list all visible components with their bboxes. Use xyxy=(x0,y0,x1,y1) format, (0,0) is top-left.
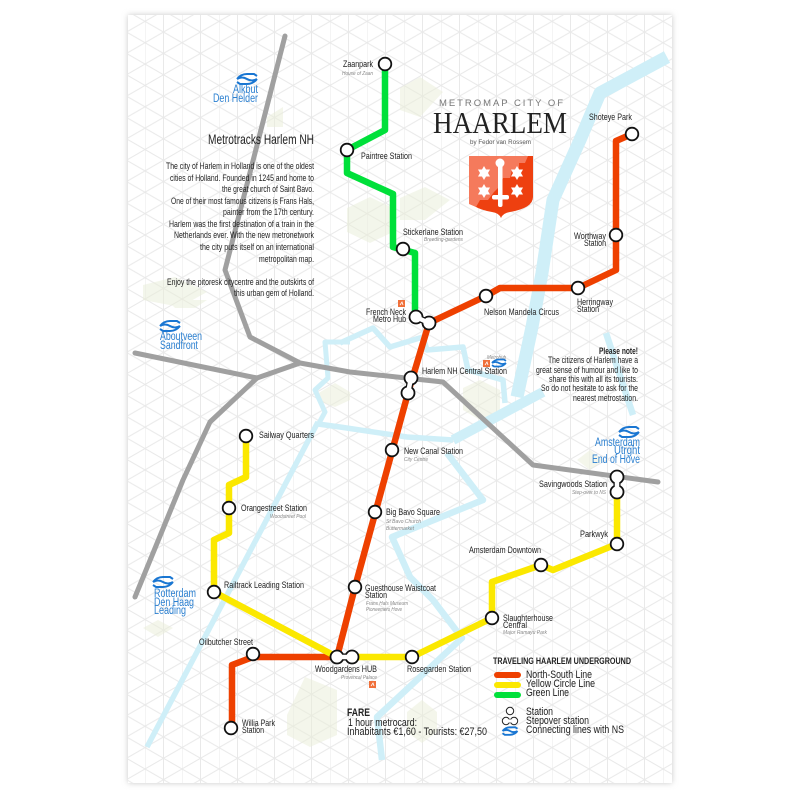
NS connection: Amsterdam xyxy=(592,427,641,466)
station labels: Herringway xyxy=(577,297,613,308)
station labels: Guesthouse Waistcoat xyxy=(365,583,436,594)
intro text panel: metropolitan map. xyxy=(259,254,314,265)
north-south line xyxy=(232,134,632,728)
intro text panel: this urban gem of Holland. xyxy=(234,288,314,299)
station labels: Sailway Quarters xyxy=(259,430,314,441)
NS connection: Aboutveen xyxy=(160,321,202,352)
station labels: Metrohub xyxy=(487,355,506,361)
title block: METROMAP CITY OF xyxy=(439,98,563,109)
legend: Station xyxy=(526,706,553,718)
icon: NS Central Station xyxy=(492,360,506,366)
NS connection: Alkbut xyxy=(213,74,259,105)
title block: HAARLEM xyxy=(433,105,567,140)
stepover station: Woodgardens xyxy=(330,650,358,664)
station labels: Major Ramayu Park xyxy=(503,630,547,636)
station labels: Oilbutcher Street xyxy=(199,637,253,648)
intro text panel: Harlem was the first destination of a train in the xyxy=(169,219,314,230)
station labels: Central xyxy=(503,620,527,631)
station labels: Station xyxy=(242,725,264,736)
green line xyxy=(347,64,415,318)
fare info: Inhabitants €1,60 - Tourists: €27,50 xyxy=(347,726,487,738)
callout: please note: nearest metrostation. xyxy=(573,393,638,404)
rivers and canals xyxy=(147,57,667,760)
station labels: Station xyxy=(577,304,599,315)
legend: Connecting lines with NS xyxy=(526,724,624,736)
intro text panel: Netherlands ever. With the new metronetwork xyxy=(174,230,314,241)
station labels: Railtrack Leading Station xyxy=(224,580,304,591)
callout: please note: So do not hesitate to ask for the xyxy=(541,383,638,394)
station labels: Parkwyk xyxy=(580,529,608,540)
legend: Yellow Circle Line xyxy=(526,678,595,690)
NS connection: Rotterdam: Leading xyxy=(154,605,186,617)
legend: Green Line xyxy=(526,687,569,699)
station labels: House of Zaan xyxy=(342,71,373,77)
legend: North-South Line xyxy=(526,669,592,681)
station labels: Slaughterhouse xyxy=(503,613,553,624)
station labels: Zaanpark xyxy=(343,59,373,70)
station labels: Buttermarket xyxy=(386,526,415,532)
NS connection: Rotterdam xyxy=(153,577,196,617)
NS connection: Alkbut: Den Helder xyxy=(213,93,258,105)
NS connection: Alkbut: Alkbut xyxy=(233,84,259,96)
stations xyxy=(208,58,638,734)
intro text panel: The city of Harlem in Holland is one of the oldest xyxy=(166,161,314,172)
legend: Stepover station xyxy=(526,715,589,727)
paper sheet xyxy=(128,15,672,783)
NS connection: Rotterdam: Rotterdam xyxy=(154,588,196,600)
title block xyxy=(433,98,567,146)
station labels: Pioneemers Hove xyxy=(366,607,402,613)
stepover station: French Neck xyxy=(410,310,436,330)
station labels: Metro Hub xyxy=(373,314,406,325)
station labels: Willia Park xyxy=(242,718,275,729)
NS connection: Amsterdam: End of Hove xyxy=(592,454,640,466)
title block: by Fedor van Rossem xyxy=(470,139,531,146)
station labels: Orangestreet Station xyxy=(241,503,307,514)
callout: please note: great sense of humour and like to xyxy=(536,365,638,376)
station labels: Savingwoods Station xyxy=(539,479,607,490)
station labels: Worthway xyxy=(574,231,606,242)
station labels: Amsterdam Downtown xyxy=(469,545,541,556)
NS connection: Aboutveen: Sandfront xyxy=(160,340,199,352)
intro text panel xyxy=(166,131,314,299)
fare info: FARE xyxy=(347,707,370,719)
NS connection: Rotterdam: Den Haag xyxy=(154,597,194,609)
station labels: St Bavo Church xyxy=(386,519,421,525)
intro text panel: painter from the 17th century. xyxy=(223,207,314,218)
callout: please note xyxy=(536,346,639,404)
station labels: Harlem NH Central Station xyxy=(422,366,507,377)
station labels: Breeding-gardens xyxy=(424,237,463,243)
NS connection: Amsterdam: Amsterdam xyxy=(595,437,640,449)
NS connection: Aboutveen: Aboutveen xyxy=(160,331,202,343)
station labels: Rosegarden Station xyxy=(407,664,471,675)
callout: please note: The citizens of Harlem have a xyxy=(548,355,639,366)
station labels: Woodstreet Pool xyxy=(270,514,307,520)
station labels: City Centre xyxy=(404,457,428,463)
station labels: Shoteye Park xyxy=(589,112,632,123)
legend: TRAVELING HAARLEM UNDERGROUND xyxy=(493,656,631,667)
legend xyxy=(493,656,631,736)
station labels: Nelson Mandela Circus xyxy=(484,307,559,318)
NS connection: Amsterdam: Utrght xyxy=(614,445,641,457)
station labels: Step-over to NS xyxy=(572,490,607,496)
stepover station: Harlem Central xyxy=(402,372,418,400)
icon: Haarlem coat of arms shield xyxy=(469,156,533,218)
yellow circle line xyxy=(214,436,617,657)
callout: please note: Please note! xyxy=(599,346,638,357)
station labels xyxy=(199,59,632,736)
intro text panel: the city puts itself on an international xyxy=(200,242,314,253)
intro text panel: One of their most famous citizens is Frans Hals, xyxy=(171,196,314,207)
station labels: Paintree Station xyxy=(361,151,412,162)
intro text panel: the great church of Saint Bavo. xyxy=(222,184,314,195)
icons: metro hub markers xyxy=(369,300,490,688)
callout: please note: share this with all its tourists. xyxy=(549,374,638,385)
station labels: French Neck xyxy=(366,307,406,318)
intro text panel: Metrotracks Harlem NH xyxy=(208,131,314,147)
station labels: Station xyxy=(365,590,387,601)
station labels: Provencal Palace xyxy=(341,675,377,681)
station labels: Frans Hals Museum xyxy=(366,601,408,607)
station labels: New Canal Station xyxy=(404,446,463,457)
fare info: 1 hour metrocard: xyxy=(348,717,417,729)
fare info xyxy=(347,707,487,738)
station labels: Station xyxy=(584,238,606,249)
intro text panel: Enjoy the pitoresk citycentre and the outskirts of xyxy=(167,277,314,288)
station labels: Big Bavo Square xyxy=(386,507,440,518)
pale green city districts xyxy=(143,77,603,747)
station labels: Woodgardens HUB xyxy=(315,664,377,675)
stepover station: Savingwoods xyxy=(610,470,624,498)
national rail lines xyxy=(135,36,658,597)
intro text panel: cities of Holland. Founded in 1245 and home to xyxy=(170,173,314,184)
station labels: Stickerlane Station xyxy=(403,227,463,238)
